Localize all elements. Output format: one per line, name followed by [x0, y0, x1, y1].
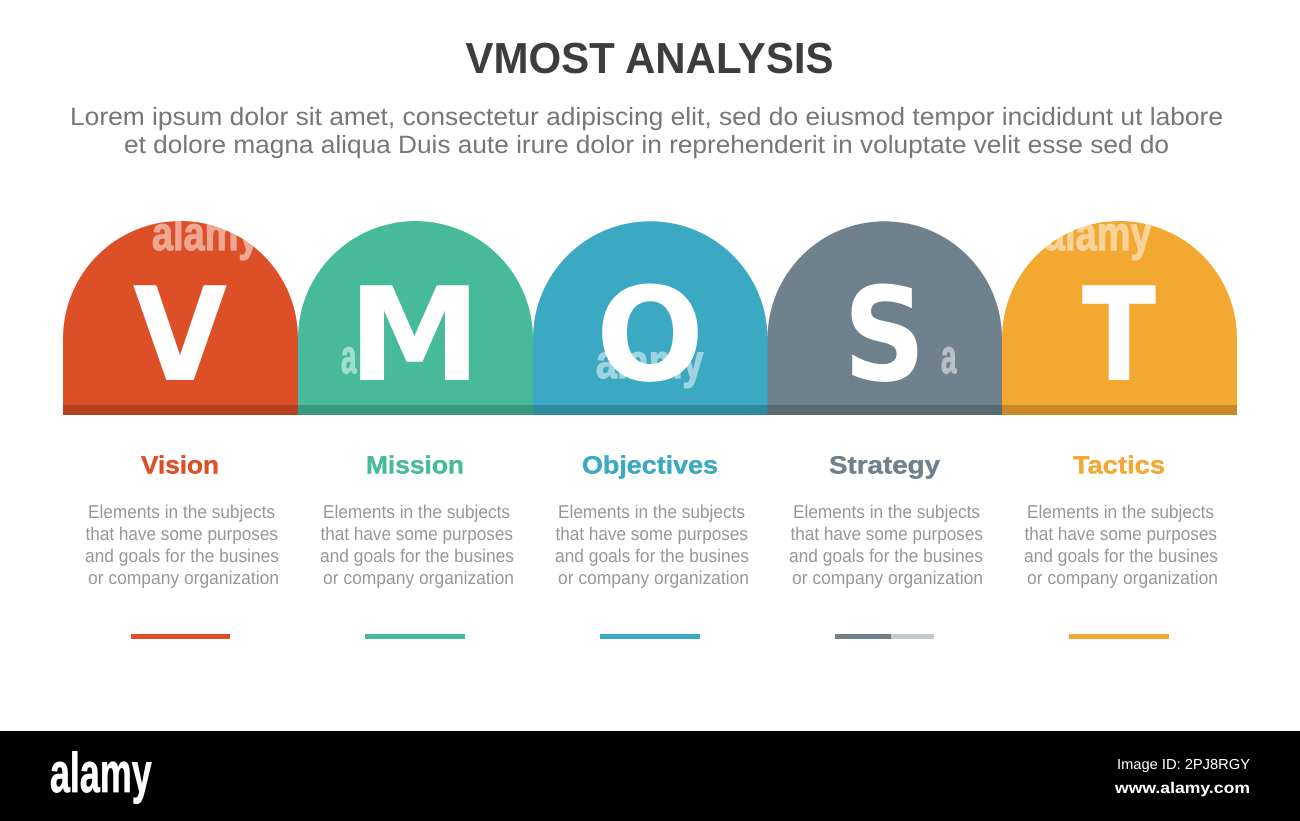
base band: tactics: [1002, 405, 1237, 415]
letter T: T: [1082, 259, 1156, 411]
arch: tactics: [1002, 221, 1237, 415]
watermark: mission: a: [341, 331, 357, 384]
description: strategy: [789, 501, 983, 588]
base band: strategy: [768, 405, 1002, 415]
panel: mission: [298, 221, 533, 639]
image id: Image ID: 2PJ8RGY: [1117, 757, 1250, 773]
description: vision: and goals for the busines: [85, 545, 279, 566]
arch: mission: [298, 221, 533, 415]
description: strategy: that have some purposes: [790, 523, 983, 544]
underline: mission: [365, 634, 465, 639]
title: VMOST ANALYSIS: [465, 35, 834, 83]
description: objectives: or company organization: [558, 567, 749, 588]
watermark: objectives: alamy: [596, 336, 704, 389]
base band: vision: [63, 405, 298, 415]
letter M: M: [348, 259, 481, 411]
description: objectives: [555, 501, 749, 588]
watermark: strategy: a: [941, 331, 957, 384]
description: mission: Elements in the subjects: [323, 501, 510, 522]
description: vision: Elements in the subjects: [88, 501, 275, 522]
base band: objectives: [533, 405, 768, 415]
description: tactics: and goals for the busines: [1024, 545, 1218, 566]
description: mission: [320, 501, 514, 588]
intro text block: et dolore magna aliqua Duis aute irure dolor in reprehenderit in voluptate velit esse sed do: [124, 131, 1169, 159]
arch: strategy: [768, 221, 1002, 415]
description: mission: that have some purposes: [320, 523, 513, 544]
description: objectives: Elements in the subjects: [558, 501, 745, 522]
description: tactics: [1024, 501, 1218, 588]
footer bar: [0, 731, 1300, 821]
description: vision: [85, 501, 279, 588]
letter S: S: [843, 259, 926, 411]
panel: tactics: [1002, 208, 1237, 639]
description: mission: or company organization: [323, 567, 514, 588]
heading: vision: Vision: [141, 452, 219, 480]
watermark: tactics: alamy: [1044, 208, 1152, 261]
website: www.alamy.com: [1114, 780, 1250, 797]
panel: objectives: [533, 221, 768, 639]
arch: objectives: [533, 221, 768, 415]
heading: mission: Mission: [366, 452, 464, 480]
underline: tactics: [1069, 634, 1169, 639]
panel: strategy: [768, 221, 1002, 639]
underline: vision: [131, 634, 230, 639]
description: tactics: or company organization: [1027, 567, 1218, 588]
underline: objectives: [600, 634, 700, 639]
description: mission: and goals for the busines: [320, 545, 514, 566]
arch: vision: [63, 221, 298, 415]
description: strategy: and goals for the busines: [789, 545, 983, 566]
description: objectives: and goals for the busines: [555, 545, 749, 566]
base band: mission: [298, 405, 533, 415]
description: objectives: that have some purposes: [556, 523, 748, 544]
intro text block: [70, 103, 1223, 159]
letter V: V: [133, 259, 227, 411]
intro text block: Lorem ipsum dolor sit amet, consectetur adipiscing elit, sed do eiusmod tempor incididunt ut labore: [70, 103, 1223, 131]
description: tactics: Elements in the subjects: [1027, 501, 1214, 522]
heading: objectives: Objectives: [582, 452, 718, 480]
watermark: vision: alamy: [152, 208, 260, 261]
description: vision: or company organization: [88, 567, 279, 588]
description: strategy: or company organization: [792, 567, 983, 588]
heading: strategy: Strategy: [829, 452, 940, 480]
footer logo: alamy: [50, 741, 152, 804]
description: tactics: that have some purposes: [1024, 523, 1217, 544]
heading: tactics: Tactics: [1073, 452, 1165, 480]
underline: strategy: [835, 634, 934, 639]
description: vision: that have some purposes: [86, 523, 278, 544]
letter O: O: [596, 259, 704, 411]
panel: vision: [63, 208, 298, 639]
description: strategy: Elements in the subjects: [793, 501, 980, 522]
